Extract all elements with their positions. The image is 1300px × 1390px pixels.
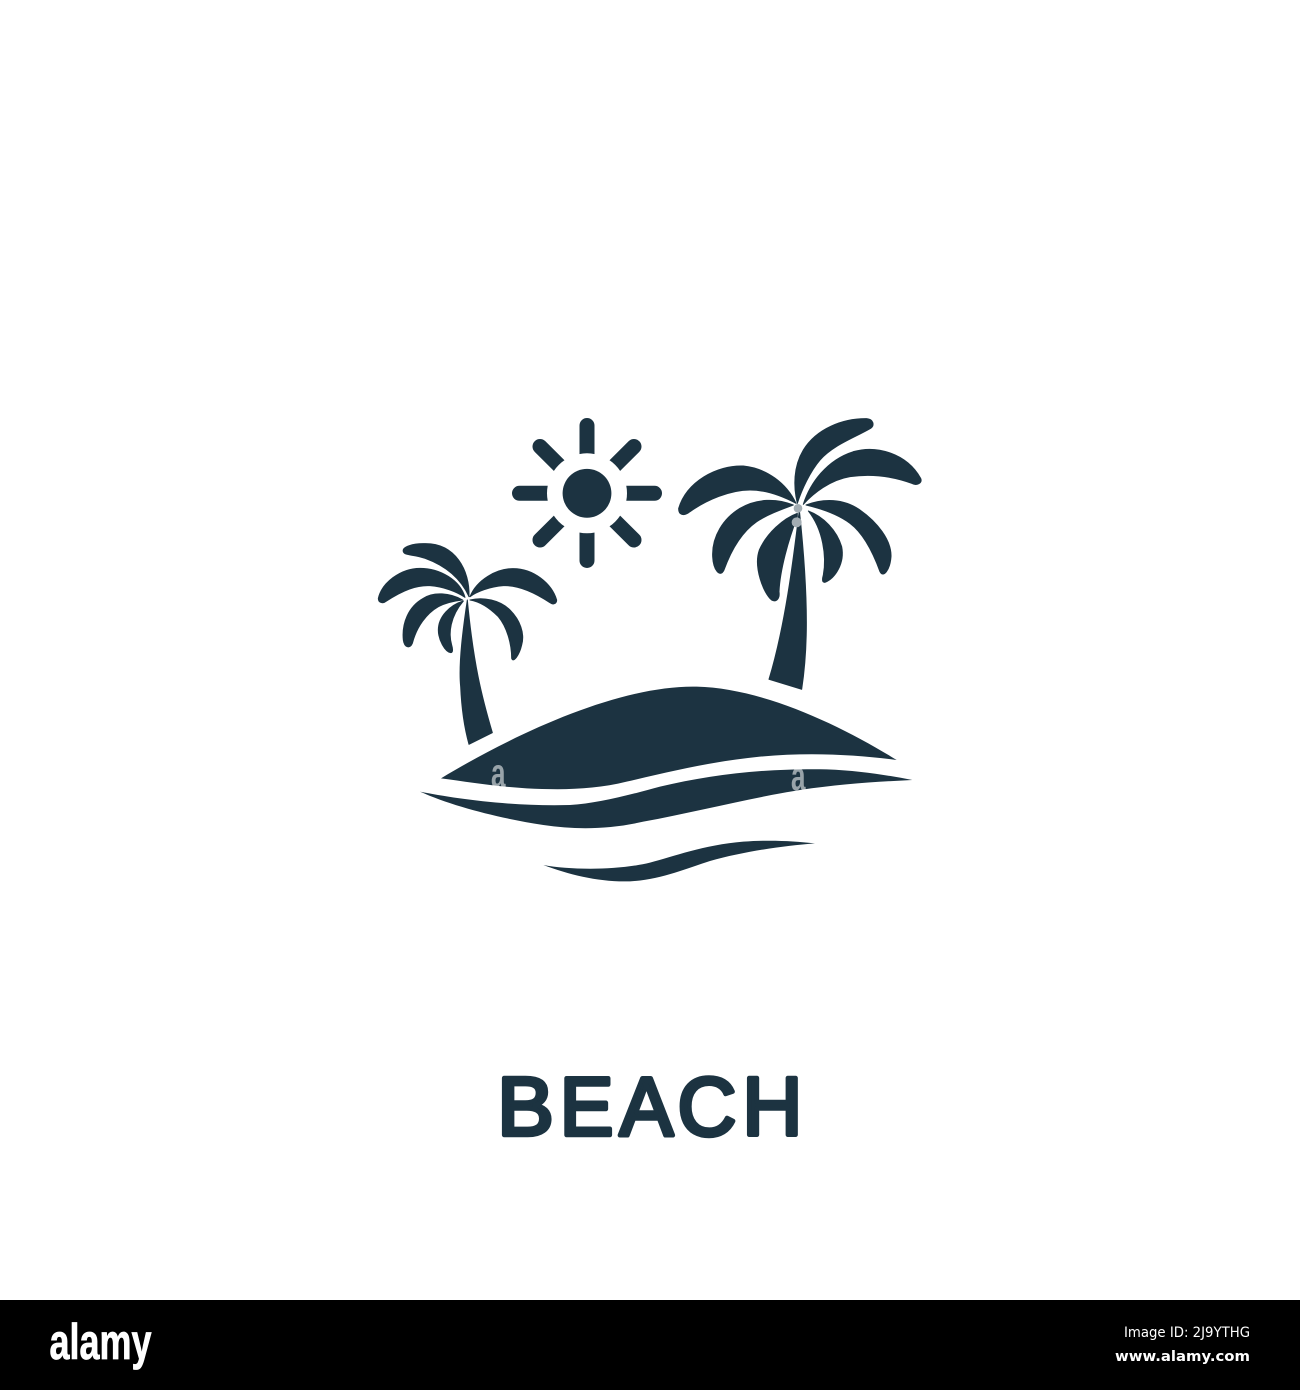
- icon: large palm tree: [679, 419, 921, 689]
- watermark letters: a: [791, 753, 806, 799]
- title: BEACH: A: [620, 1060, 674, 1153]
- website: www.alamy.com: [1115, 1349, 1250, 1365]
- title: BEACH: [497, 1060, 802, 1153]
- logo: alamy: alamy: [50, 1314, 152, 1370]
- icon: island and waves: [420, 687, 912, 881]
- watermark letters: [491, 750, 806, 799]
- image id: Image ID: 2J9YTHG: [1124, 1325, 1250, 1341]
- island: [441, 687, 897, 789]
- title: BEACH: E: [560, 1060, 613, 1153]
- watermark letters: a: [491, 750, 506, 796]
- title: BEACH: B: [497, 1060, 554, 1153]
- icon: sun: [520, 426, 654, 560]
- footer bar: [0, 1300, 1300, 1390]
- small wave: [543, 841, 815, 881]
- large wave: [420, 769, 912, 828]
- icon: small palm tree: [378, 544, 557, 744]
- title: BEACH: C: [678, 1060, 736, 1153]
- title: BEACH: H: [742, 1060, 802, 1153]
